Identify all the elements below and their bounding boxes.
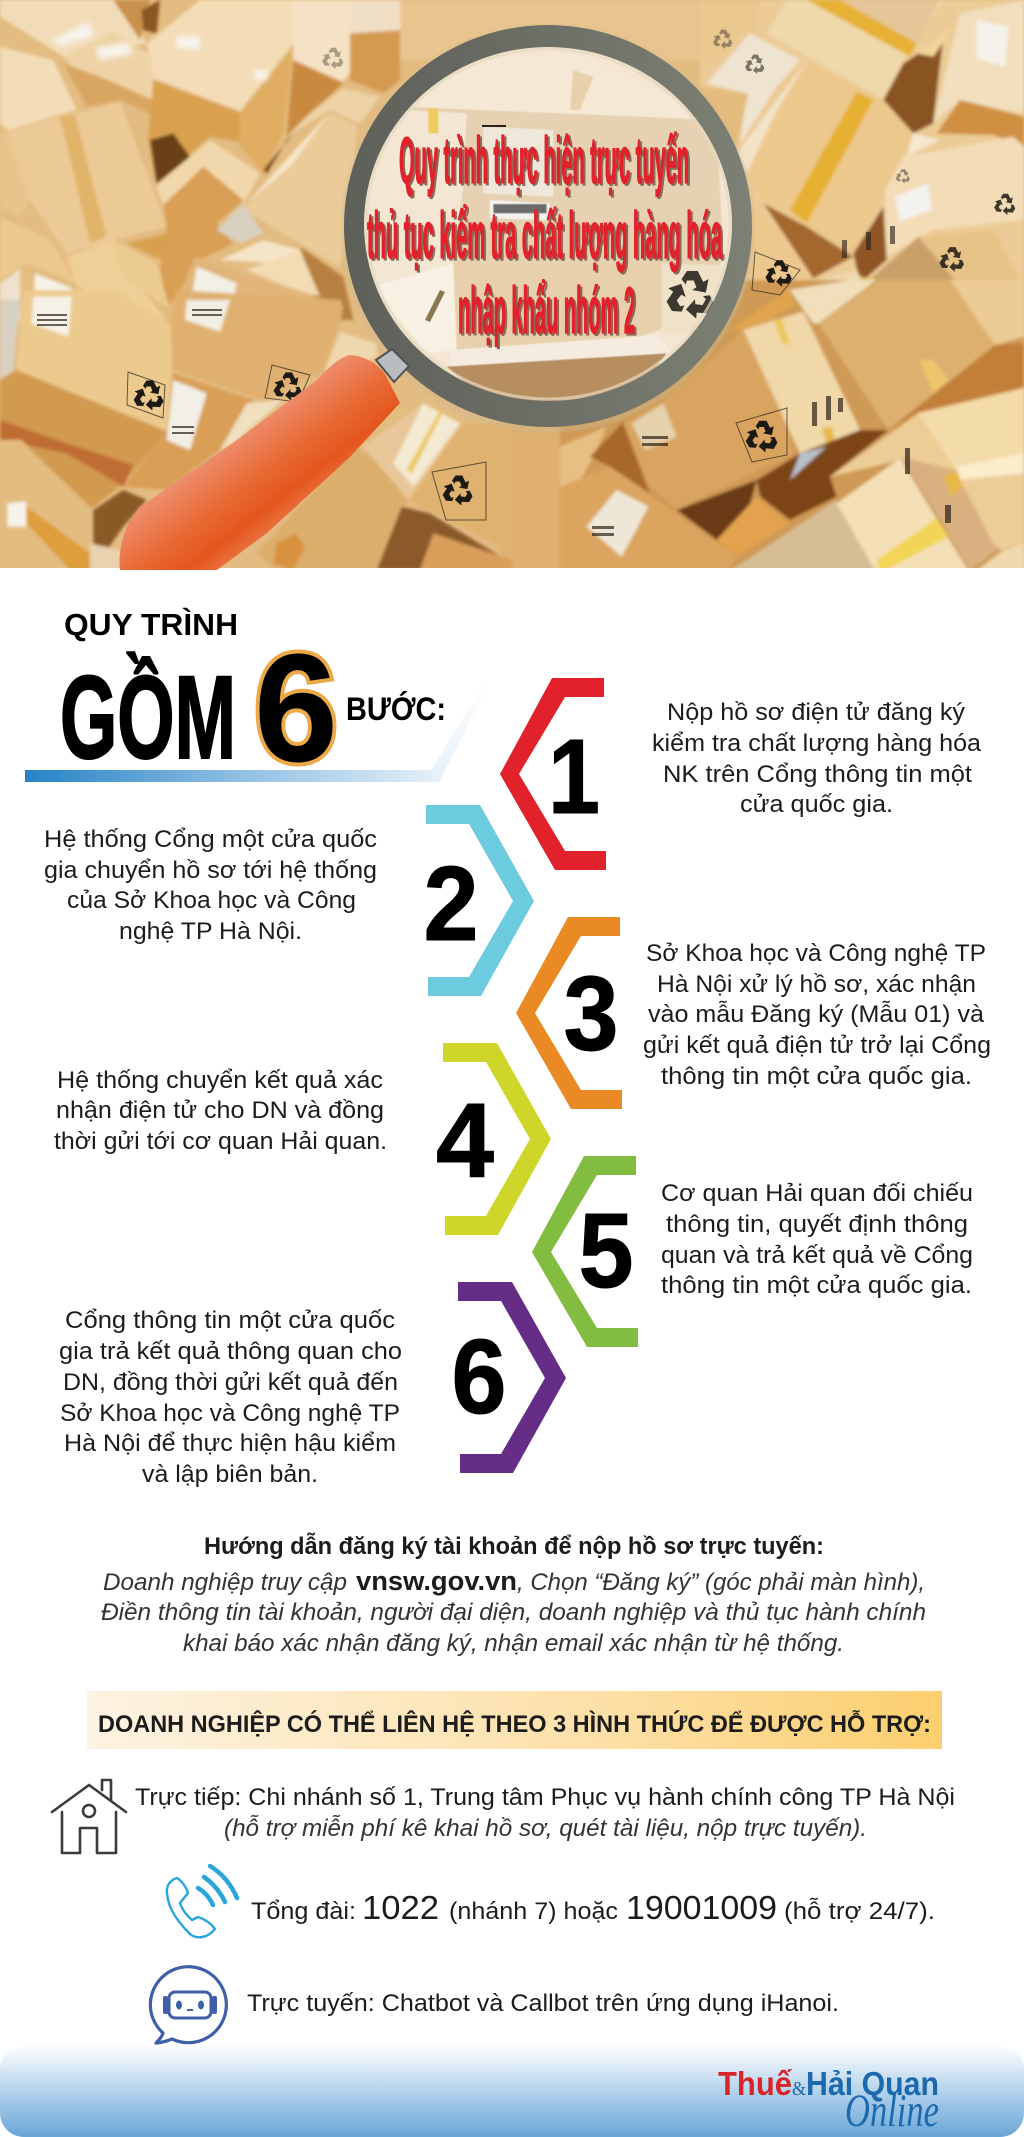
- step 2 text: [44, 826, 377, 945]
- step 5 text: Cơ quan Hải quan đối chiếu: [661, 1180, 973, 1207]
- icon: magnifying glass: [120, 25, 752, 570]
- heading: Quy trình gồm 6 bước: GỒM: [60, 651, 236, 784]
- heading: Quy trình gồm 6 bước: BƯỚC:: [346, 691, 446, 727]
- step 3 text: Hà Nội xử lý hồ sơ, xác nhận: [657, 971, 976, 998]
- step 6 text: và lập biên bản.: [142, 1461, 318, 1488]
- contact: hotline: [251, 1889, 935, 1926]
- step 4 text: thời gửi tới cơ quan Hải quan.: [54, 1128, 387, 1155]
- logo: Thuế & Hải Quan Online: [718, 2065, 939, 2137]
- chevron 5: [532, 1156, 638, 1347]
- step 4 text: Hệ thống chuyển kết quả xác: [57, 1067, 383, 1094]
- chevron 3: [516, 917, 622, 1109]
- chevron 6: [458, 1282, 566, 1473]
- step 1 text: [652, 699, 982, 818]
- icon: house: [52, 1780, 126, 1853]
- hero photo: cardboard boxes: [0, 0, 1024, 580]
- step 5: [532, 1156, 973, 1347]
- bottom-left boxes: [0, 290, 512, 570]
- recycling marks on boxes: [127, 30, 1016, 520]
- step 3 text: thông tin một cửa quốc gia.: [661, 1063, 972, 1090]
- title in lens: [367, 123, 722, 347]
- step 6 text: [59, 1307, 402, 1488]
- registration guide text block: vnsw.gov.vn: [356, 1566, 517, 1596]
- step 6 text: gia trả kết quả thông quan cho: [59, 1338, 402, 1365]
- heading: Quy trình gồm 6 bước: QUY TRÌNH: [64, 607, 238, 642]
- registration guide text block: Doanh nghiệp truy cập: [103, 1569, 347, 1596]
- contact: hotline: (hỗ trợ 24/7).: [784, 1898, 935, 1925]
- step 3 text: gửi kết quả điện tử trở lại Cổng: [643, 1032, 991, 1059]
- logo: Thuế & Hải Quan Online: &: [792, 2078, 806, 2100]
- step 3: 3: [564, 955, 618, 1073]
- registration guide text block: Hướng dẫn đăng ký tài khoản để nộp hồ sơ trực tuyến:: [204, 1532, 824, 1560]
- registration guide text block: Điền thông tin tài khoản, người đại diện, doanh nghiệp và thủ tục hành chính: [101, 1599, 926, 1626]
- step 1 text: kiểm tra chất lượng hàng hóa: [652, 730, 982, 757]
- step 1 text: NK trên Cổng thông tin một: [663, 761, 972, 788]
- step 6 text: DN, đồng thời gửi kết quả đến: [63, 1369, 398, 1396]
- step 5: 5: [578, 1192, 634, 1310]
- shipping labels barcodes and handling pictograms: [37, 226, 951, 536]
- logo: Thuế & Hải Quan Online: Hải Quan: [806, 2065, 939, 2102]
- step 2 text: Hệ thống Cổng một cửa quốc: [44, 826, 377, 853]
- icon: phone: [167, 1866, 237, 1937]
- step 1 text: Nộp hồ sơ điện tử đăng ký: [667, 699, 965, 726]
- step 1: 1: [548, 718, 600, 836]
- step 2: [44, 805, 534, 996]
- contact banner: [87, 1691, 942, 1749]
- step 3 text: Sở Khoa học và Công nghệ TP: [646, 940, 986, 967]
- lens glass: [360, 40, 740, 410]
- contact: in person: [135, 1784, 955, 1842]
- step 5 text: thông tin một cửa quốc gia.: [661, 1272, 972, 1299]
- step 1 text: cửa quốc gia.: [740, 791, 893, 818]
- contact: hotline: 19001009: [626, 1889, 777, 1926]
- lens rim: [344, 28, 752, 430]
- logo: Thuế & Hải Quan Online: Online: [845, 2085, 939, 2137]
- top-left boxes: [0, 0, 400, 320]
- step 6 text: Sở Khoa học và Công nghệ TP: [60, 1400, 400, 1427]
- step 6: [59, 1282, 566, 1488]
- step 3: [516, 917, 991, 1109]
- footer band: [0, 2045, 1024, 2137]
- chevron 4: [443, 1043, 551, 1235]
- contact: hotline: (nhánh 7) hoặc: [449, 1898, 618, 1925]
- step 5 text: quan và trả kết quả về Cổng: [661, 1242, 973, 1269]
- top-right boxes: [700, 0, 1024, 300]
- step 1: [500, 678, 982, 870]
- chevron 2: [426, 805, 534, 996]
- contact: in person: Trực tiếp: Chi nhánh số 1, Trung tâm Phục vụ hành chính công TP Hà Nội: [135, 1784, 955, 1811]
- step 5 text: [661, 1180, 973, 1299]
- step 2 text: của Sở Khoa học và Công: [67, 887, 356, 914]
- step 3 text: [643, 940, 991, 1090]
- step 4 text: [54, 1067, 387, 1155]
- big number 6: 6: [254, 622, 338, 794]
- heading: Quy trình gồm 6 bước: [25, 607, 491, 794]
- bottom-right boxes: [560, 280, 1024, 573]
- step 6 text: Cổng thông tin một cửa quốc: [65, 1307, 395, 1334]
- logo: Thuế & Hải Quan Online: Thuế: [718, 2065, 793, 2102]
- step 2: 2: [424, 845, 478, 963]
- step 2 text: nghệ TP Hà Nội.: [119, 918, 302, 945]
- contact: in person: (hỗ trợ miễn phí kê khai hồ sơ, quét tài liệu, nộp trực tuyến).: [224, 1814, 867, 1842]
- step 4: 4: [436, 1082, 494, 1200]
- step 4: [54, 1043, 551, 1235]
- text: nhập khẩu nhóm 2: [458, 273, 635, 347]
- contact: hotline: 1022: [362, 1889, 439, 1926]
- step 3 text: vào mẫu Đăng ký (Mẫu 01) và: [648, 1001, 985, 1028]
- contact banner: DOANH NGHIỆP CÓ THỂ LIÊN HỆ THEO 3 HÌNH THỨC ĐỂ ĐƯỢC HỖ TRỢ:: [98, 1709, 931, 1738]
- contact: hotline: Tổng đài:: [251, 1898, 356, 1925]
- registration guide text block: khai báo xác nhận đăng ký, nhận email xác nhận từ hệ thống.: [183, 1630, 844, 1657]
- lens ring: [344, 25, 752, 427]
- step 2 text: gia chuyển hồ sơ tới hệ thống: [44, 857, 377, 884]
- orange handle: [120, 355, 400, 570]
- step 4 text: nhận điện tử cho DN và đồng: [56, 1097, 384, 1124]
- icon: chatbot: [150, 1967, 226, 2043]
- handle ferrule: [376, 349, 409, 382]
- registration guide text block: , Chọn “Đăng ký” (góc phải màn hình),: [517, 1569, 925, 1596]
- white photo labels and soft glints: [52, 22, 268, 80]
- step 5 text: thông tin, quyết định thông: [666, 1211, 968, 1238]
- chevron 1: [500, 678, 606, 870]
- heading underline bar: [25, 680, 491, 782]
- registration guide text block: [101, 1532, 926, 1657]
- step 6 text: Hà Nội để thực hiện hậu kiểm: [64, 1430, 396, 1457]
- step 6: 6: [452, 1318, 506, 1436]
- contact: online: Trực tuyến: Chatbot và Callbot trên ứng dụng iHanoi.: [247, 1990, 839, 2017]
